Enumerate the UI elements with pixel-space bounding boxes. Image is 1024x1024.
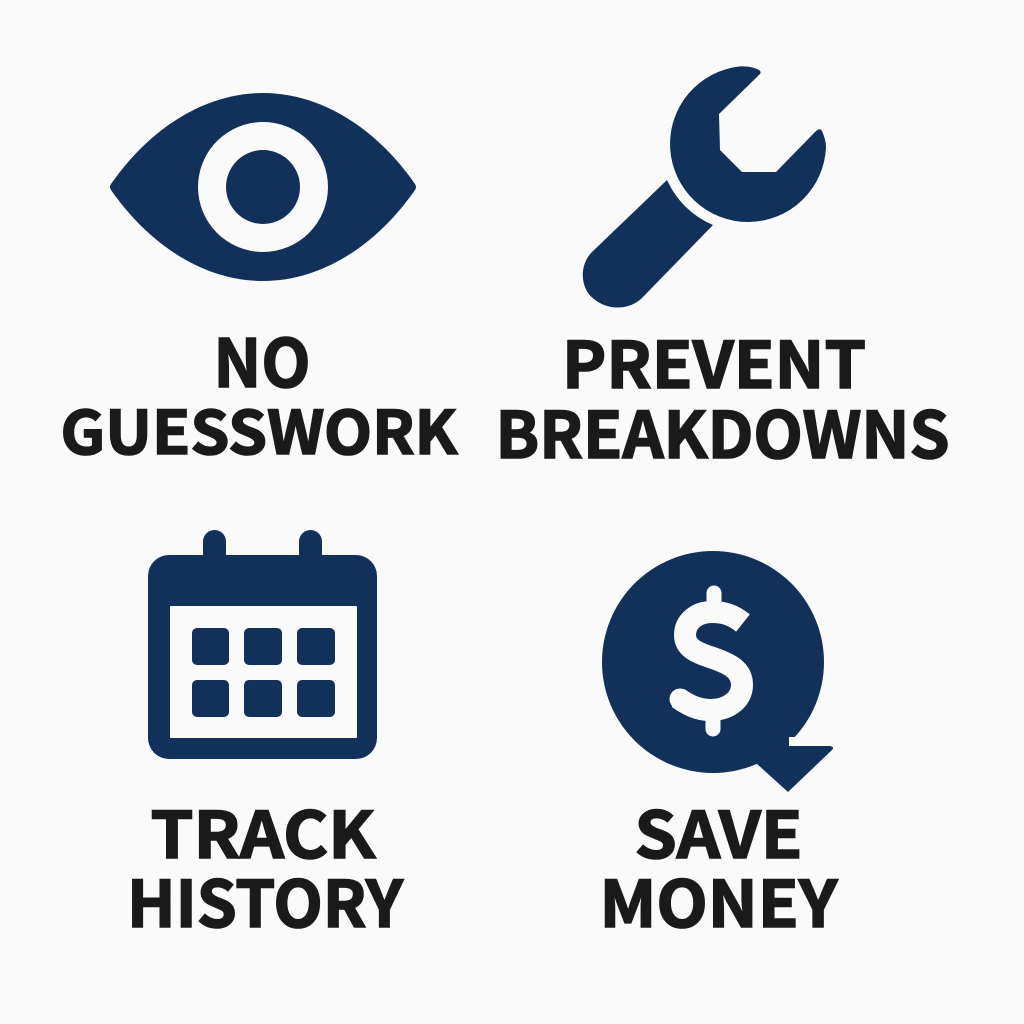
- icon: wrench: [583, 66, 826, 308]
- icon: calendar: [148, 530, 377, 759]
- label: prevent breakdowns: PREVENT: [562, 315, 866, 407]
- label: no guesswork: NO: [214, 311, 310, 407]
- label: save money: [600, 785, 838, 946]
- label: prevent breakdowns: [496, 315, 950, 477]
- icon: dollar coin: [602, 551, 833, 792]
- label: no guesswork: [60, 311, 458, 472]
- label: prevent breakdowns: BREAKDOWNS: [496, 385, 950, 477]
- icon: eye: [110, 93, 416, 281]
- label: save money: SAVE: [634, 785, 802, 877]
- label: track history: [127, 785, 404, 946]
- label: track history: HISTORY: [127, 854, 404, 946]
- label: no guesswork: GUESSWORK: [60, 385, 458, 472]
- label: save money: MONEY: [600, 854, 838, 946]
- label: track history: TRACK: [150, 785, 377, 877]
